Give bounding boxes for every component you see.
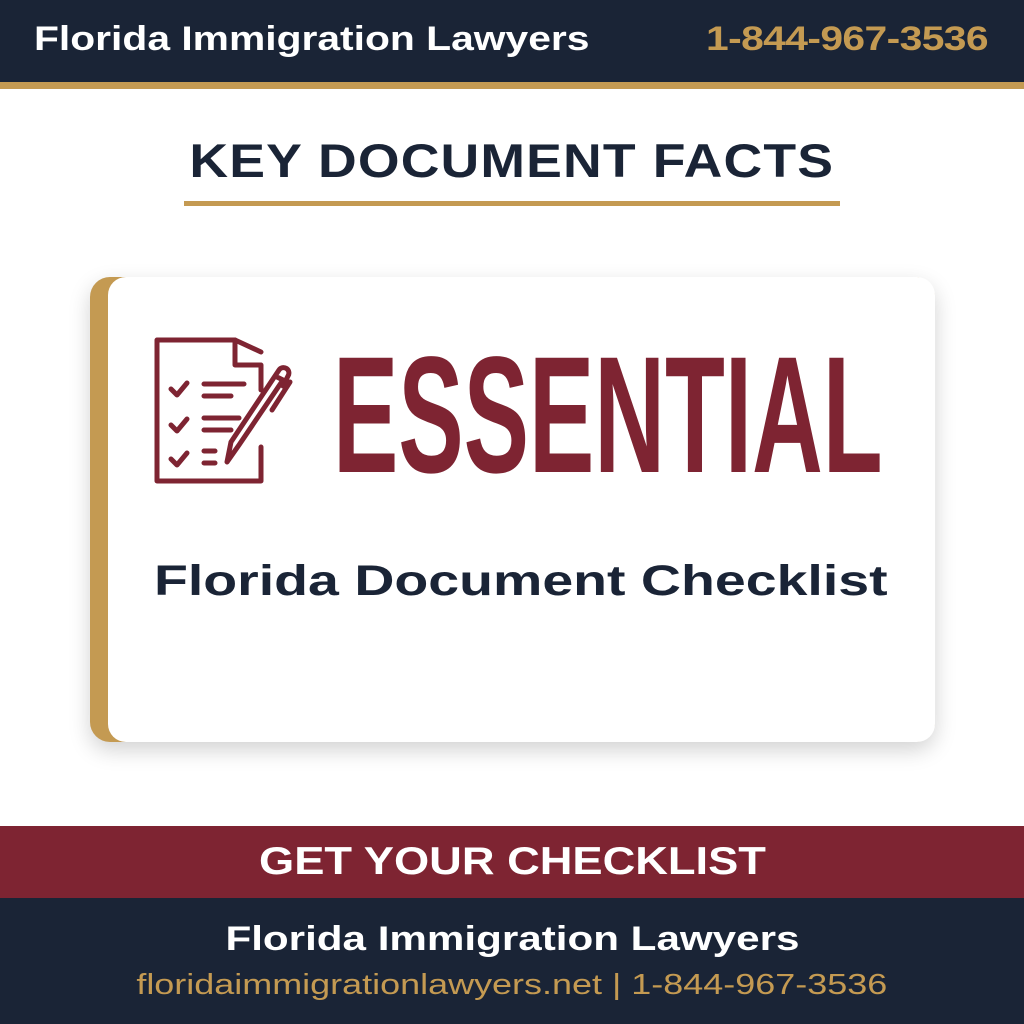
icon: checklist with pen <box>154 338 292 484</box>
title: KEY DOCUMENT FACTS <box>190 134 834 187</box>
footer firm name: Florida Immigration Lawyers <box>225 920 799 958</box>
header phone: 1-844-967-3536 <box>706 20 988 58</box>
header firm name: Florida Immigration Lawyers <box>34 20 589 58</box>
headline: ESSENTIAL: ESSENTIAL <box>333 323 883 508</box>
CTA band: GET YOUR CHECKLIST <box>259 840 765 883</box>
CTA band <box>0 826 1024 898</box>
footer contact: floridaimmigrationlawyers.net | 1-844-967-3536 <box>137 969 887 1001</box>
header bar <box>0 0 1024 89</box>
footer <box>0 898 1024 1024</box>
card <box>90 277 935 742</box>
subheading: Florida Document Checklist <box>154 557 888 605</box>
